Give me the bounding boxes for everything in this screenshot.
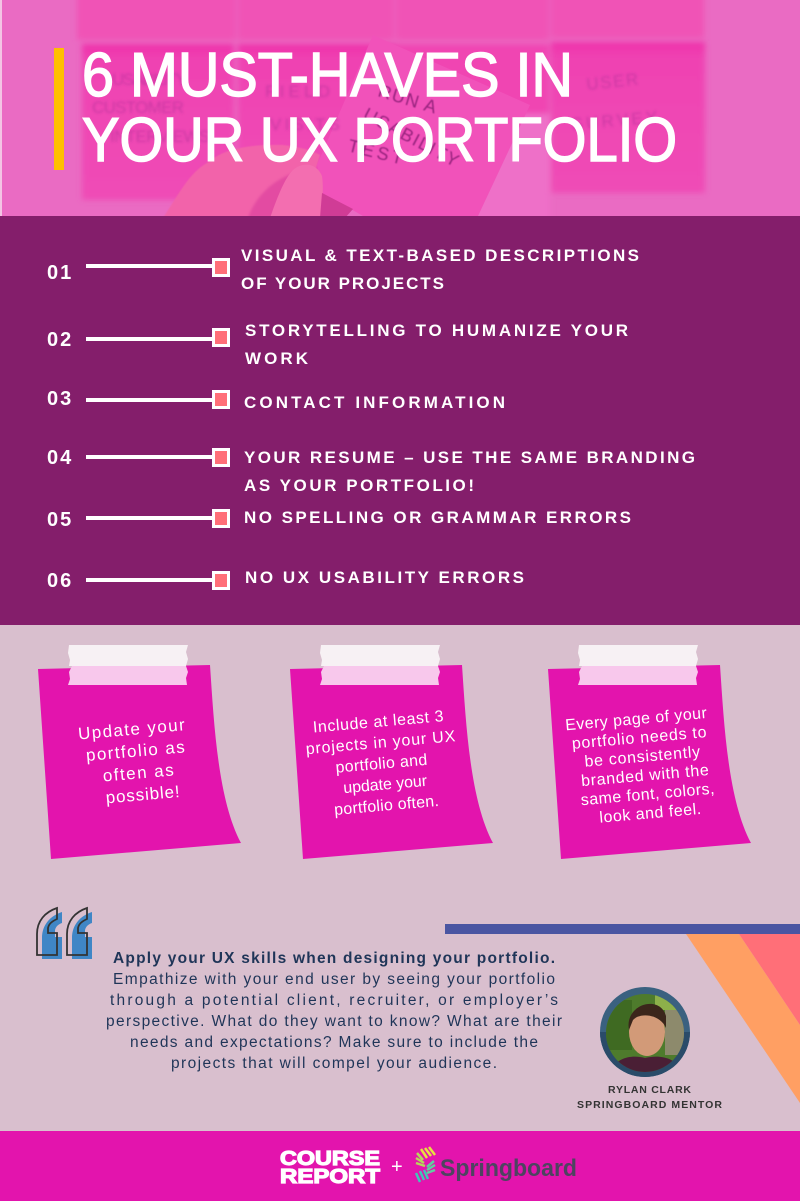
item 02: STORYTELLING TO HUMANIZE YOUR <box>245 321 628 340</box>
quote text: through a potential client, recruiter, or employer’s <box>110 992 558 1009</box>
handwriting in photo: USABILITY <box>360 104 462 171</box>
decorative orange stripe <box>686 934 800 1103</box>
decorative bar <box>445 924 800 934</box>
held sticky note <box>317 35 530 216</box>
item 04: AS YOUR PORTFOLIO! <box>244 476 474 495</box>
item 01: OF YOUR PROJECTS <box>241 274 444 293</box>
icon: quotation marks <box>37 908 92 959</box>
title: 6 MUST-HAVES IN <box>82 41 573 110</box>
title <box>82 41 677 175</box>
sticky note 3: branded with the <box>580 762 710 790</box>
handwriting in photo <box>92 70 658 171</box>
handwriting in photo: FIELD <box>265 82 330 101</box>
logo: Springboard <box>416 1147 577 1182</box>
panel: six must-haves list <box>0 216 800 625</box>
item 02 <box>47 321 628 368</box>
item 03: 03 <box>47 388 73 410</box>
sticky note 3: Every page of your <box>565 705 708 734</box>
sticky note 3: same font, colors, <box>580 781 715 809</box>
handwriting in photo: TEST <box>346 135 405 168</box>
sticky note 3: portfolio needs to <box>571 724 707 753</box>
item 03 <box>47 388 505 412</box>
tape <box>68 645 188 685</box>
quote text: projects that will compel your audience. <box>171 1055 497 1072</box>
handwriting in photo: USER <box>585 70 639 94</box>
quote text: Empathize with your end user by seeing your portfolio <box>113 971 555 988</box>
hand <box>163 145 320 218</box>
logo: Springboard: Springboard <box>440 1155 577 1182</box>
item 06: 06 <box>47 570 73 592</box>
sticky note 2: update your <box>343 773 428 797</box>
logo mark <box>416 1147 435 1182</box>
handwriting in photo: VISITS <box>270 115 340 134</box>
plus sign: + <box>391 1156 403 1178</box>
item 01 <box>47 246 639 293</box>
sticky note 2: Include at least 3 <box>312 708 444 737</box>
sticky note 1 <box>38 645 241 859</box>
header photo: sticky notes on a wall <box>0 0 800 224</box>
sticky note 1: portfolio as <box>85 737 185 765</box>
logo: Course Report: REPORT <box>280 1166 380 1188</box>
sticky note 2 <box>290 645 493 859</box>
logo: Course Report <box>280 1148 380 1188</box>
thumb <box>270 165 323 218</box>
handwriting in photo: USABILITY <box>112 70 187 89</box>
attribution: SPRINGBOARD MENTOR <box>577 1099 722 1111</box>
quote text: Apply your UX skills when designing your portfolio. <box>113 950 555 967</box>
item 06: NO UX USABILITY ERRORS <box>245 568 524 587</box>
quote text: perspective. What do they want to know? What are their <box>106 1013 562 1030</box>
quote text <box>106 950 562 1072</box>
title accent bar <box>54 48 64 170</box>
sticky note 2: projects in your UX <box>305 728 456 758</box>
tape <box>320 645 440 685</box>
sticky note 2: portfolio often. <box>333 793 440 819</box>
footer band <box>0 1131 800 1201</box>
sticky note 3: be consistently <box>584 744 701 771</box>
sticky note 2: portfolio and <box>335 752 428 777</box>
handwriting in photo: INTERVIEWS <box>110 127 210 146</box>
quote text: needs and expectations? Make sure to include the <box>130 1034 538 1051</box>
attribution: RYLAN CLARK <box>608 1084 691 1096</box>
decorative coral triangle <box>739 934 800 1025</box>
item 02: WORK <box>245 349 309 368</box>
item 05: 05 <box>47 509 73 531</box>
item 04 <box>47 447 695 495</box>
sticky note 3 <box>548 645 751 859</box>
tape <box>578 645 698 685</box>
sticky note 1: Update your <box>77 715 186 744</box>
handwriting in photo: SURVEY <box>571 108 658 134</box>
handwriting in photo: RUN A <box>376 81 439 117</box>
sticky note 1: often as <box>102 760 174 786</box>
item 03: CONTACT INFORMATION <box>244 393 505 412</box>
item 04: 04 <box>47 447 73 469</box>
logo: Course Report: COURSE <box>280 1148 380 1170</box>
title: YOUR UX PORTFOLIO <box>82 106 677 175</box>
item 05: NO SPELLING OR GRAMMAR ERRORS <box>244 508 631 527</box>
portrait: Rylan Clark <box>600 987 695 1080</box>
handwriting in photo: CUSTOMER <box>92 98 184 117</box>
item 01: 01 <box>47 262 73 284</box>
sticky note 1: possible! <box>105 782 180 807</box>
item 06 <box>47 568 524 592</box>
sticky note 3: look and feel. <box>599 801 702 827</box>
item 04: YOUR RESUME – USE THE SAME BRANDING <box>244 448 695 467</box>
attribution <box>577 1084 722 1111</box>
item 02: 02 <box>47 329 73 351</box>
item 01: VISUAL & TEXT-BASED DESCRIPTIONS <box>241 246 639 265</box>
item 05 <box>47 508 631 531</box>
